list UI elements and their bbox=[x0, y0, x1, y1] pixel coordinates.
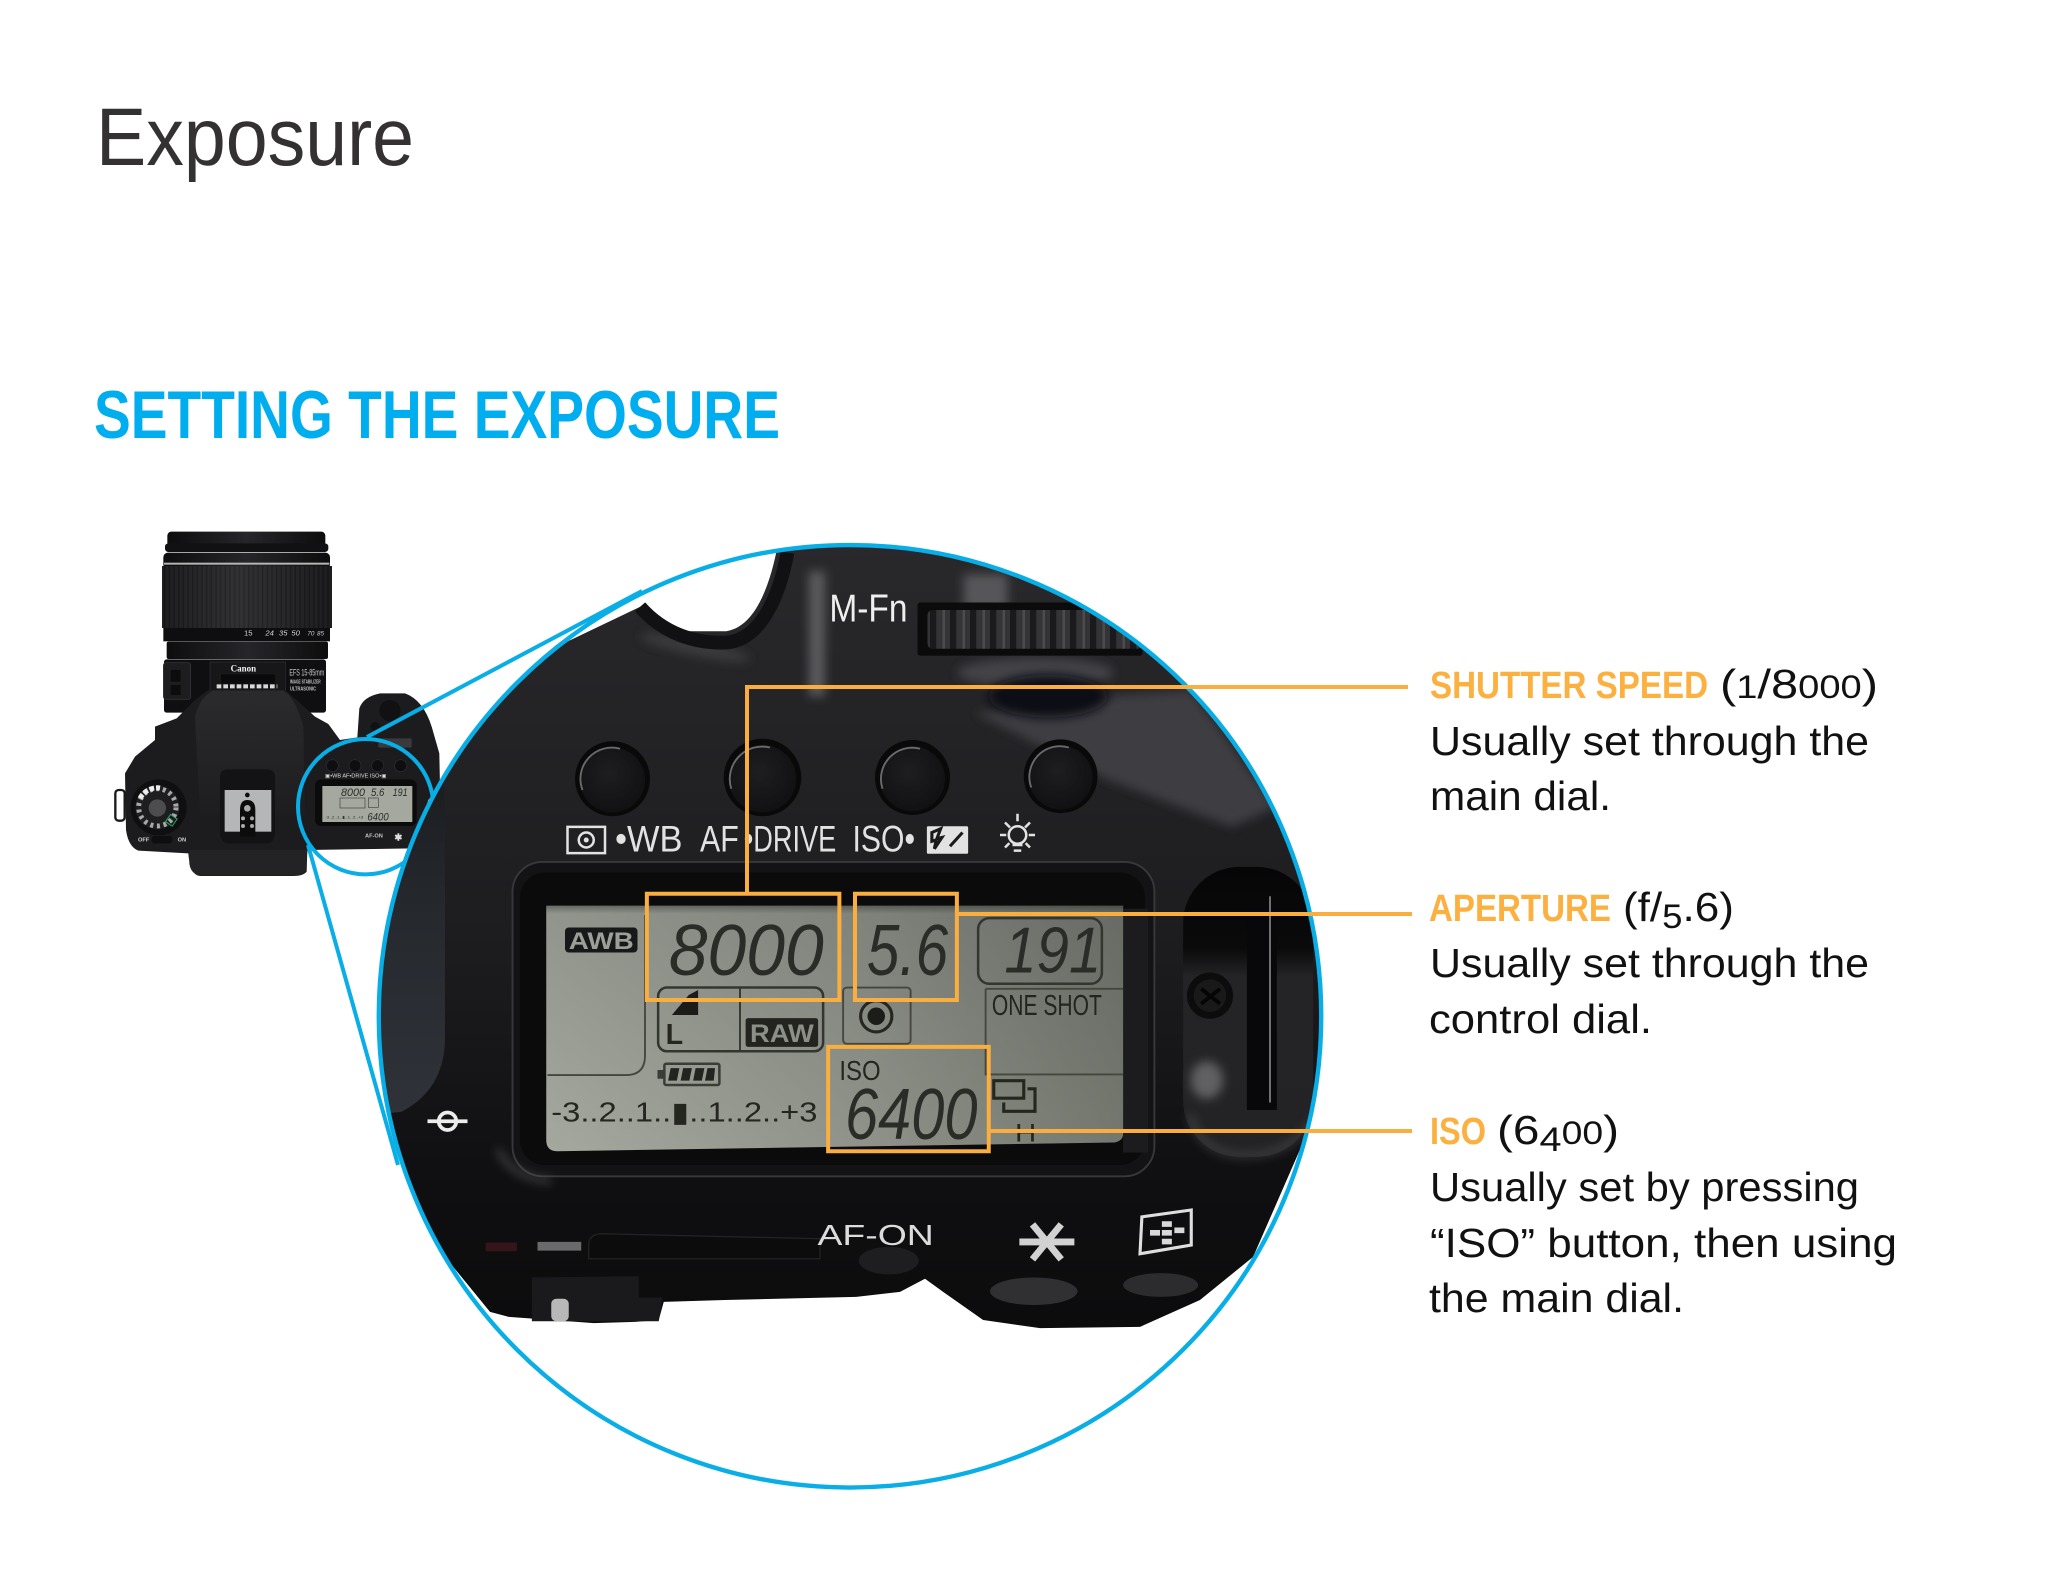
quality box bbox=[658, 988, 823, 1051]
dial recess bbox=[1183, 867, 1314, 1157]
callout: ISO bbox=[1429, 1107, 1897, 1321]
small top LCD panel: ✱ bbox=[394, 833, 402, 843]
LCD screen: L bbox=[666, 1019, 683, 1051]
LCD bezel bbox=[498, 862, 1154, 1181]
callout: ISO: 4 bbox=[1540, 1121, 1562, 1159]
callout: ISO: “ISO” button, then using bbox=[1430, 1220, 1897, 1266]
ISO readout: ISO bbox=[839, 1055, 881, 1086]
big magnifier circle bbox=[379, 545, 1321, 1488]
lens: 50 bbox=[291, 628, 301, 637]
ISO box bbox=[828, 1047, 989, 1151]
hot shoe bbox=[220, 769, 275, 843]
shutter speed box bbox=[647, 894, 839, 1000]
LCD screen bbox=[520, 872, 1148, 1165]
callout: aperture: control dial. bbox=[1429, 996, 1652, 1042]
mode dial: OFF bbox=[138, 837, 150, 843]
callout: aperture: 5 bbox=[1662, 898, 1683, 936]
button labels: AF bbox=[700, 817, 739, 859]
lens bbox=[162, 532, 332, 713]
small top LCD panel: -3..2..1..▮..1..2..+3 bbox=[325, 814, 364, 819]
camera body bbox=[125, 690, 440, 876]
callout: ISO: (6 bbox=[1497, 1107, 1533, 1153]
lower controls bbox=[486, 1210, 1198, 1321]
LCD screen: H bbox=[1015, 1119, 1036, 1147]
callout: ISO: 00 bbox=[1562, 1115, 1603, 1151]
exposure scale: -3..2..1..▮..1..2..+3 bbox=[551, 1096, 818, 1127]
lens: 85 bbox=[317, 630, 325, 637]
callout: ISO: Usually set by pressing bbox=[1430, 1164, 1859, 1210]
small top LCD panel: 8000 bbox=[341, 787, 366, 799]
callout: shutter speed: (1/8000) bbox=[1720, 661, 1878, 707]
LCD screen: AWB bbox=[569, 928, 634, 955]
small top LCD panel bbox=[315, 760, 417, 843]
frame counter bbox=[978, 918, 1102, 984]
lens: 70 bbox=[307, 630, 315, 637]
lens: Canon bbox=[231, 663, 256, 673]
heading: SETTING THE EXPOSURE bbox=[94, 377, 780, 453]
button labels: ISO• bbox=[852, 817, 915, 859]
lens: 15 bbox=[244, 628, 253, 637]
body highlights bbox=[638, 552, 1277, 827]
dial bbox=[918, 602, 1142, 656]
callout: ISO: ) bbox=[1603, 1107, 1617, 1153]
LCD screen: 6400 bbox=[845, 1074, 978, 1155]
AF point icon bbox=[428, 1112, 468, 1130]
battery bbox=[664, 1064, 719, 1085]
button labels: •WB bbox=[615, 817, 682, 859]
strap lug bbox=[115, 790, 125, 821]
top buttons bbox=[575, 739, 1098, 816]
leader lines bbox=[747, 687, 1412, 1131]
shutter readout: 8000 bbox=[669, 910, 824, 991]
orange highlight boxes bbox=[647, 894, 989, 1151]
LCD screen: RAW bbox=[750, 1020, 814, 1048]
small top LCD panel: 191 bbox=[393, 787, 408, 799]
lens: IMAGE STABILIZER bbox=[290, 680, 321, 686]
callout: aperture: APERTURE bbox=[1429, 888, 1611, 930]
small magnifier circle bbox=[298, 739, 433, 874]
button labels bbox=[568, 814, 1035, 859]
pentaprism bbox=[195, 691, 305, 817]
mode dial: ON bbox=[178, 837, 186, 843]
callout: shutter speed: SHUTTER SPEED bbox=[1430, 665, 1708, 707]
magnified camera detail bbox=[370, 540, 1350, 1488]
lens: 24 bbox=[264, 628, 274, 637]
metering box bbox=[843, 988, 911, 1044]
AF point selector icon bbox=[1140, 1210, 1191, 1254]
infographic canvas bbox=[96, 108, 1894, 1490]
asterisk icon bbox=[1019, 1224, 1074, 1259]
eyepiece bbox=[189, 850, 307, 875]
lens: ULTRASONIC bbox=[290, 686, 316, 692]
ONE SHOT label: ONE SHOT bbox=[992, 990, 1102, 1022]
small top LCD panel: ▣•WB AF•DRIVE ISO•▣ bbox=[325, 773, 387, 779]
AWB badge bbox=[565, 928, 638, 952]
lower controls: AF-ON bbox=[818, 1220, 934, 1252]
callout: aperture: (f/ bbox=[1623, 884, 1659, 930]
drive icon bbox=[994, 1081, 1035, 1111]
small top LCD panel: 6400 bbox=[367, 812, 389, 824]
camera top view bbox=[115, 532, 440, 876]
M-Fn label: M-Fn bbox=[829, 587, 908, 630]
eyepiece side panel bbox=[381, 873, 445, 1113]
lens: EFS 15-85mm bbox=[289, 667, 324, 677]
callout: shutter speed: main dial. bbox=[1430, 773, 1611, 819]
callout: aperture: .6) bbox=[1683, 884, 1734, 930]
title: Exposure bbox=[96, 92, 414, 183]
aperture readout: 5.6 bbox=[867, 910, 949, 991]
lens: 35 bbox=[279, 628, 288, 637]
button labels: •DRIVE bbox=[744, 817, 836, 859]
LCD dividers bbox=[548, 915, 1123, 1075]
callout: shutter speed bbox=[1430, 661, 1878, 819]
zoom lines bbox=[308, 591, 642, 1165]
callout: aperture bbox=[1429, 884, 1869, 1042]
small top LCD panel: AF-ON bbox=[365, 833, 383, 839]
callout: shutter speed: Usually set through the bbox=[1430, 718, 1869, 764]
grip buttons bbox=[370, 700, 412, 748]
callout: ISO: ISO bbox=[1430, 1111, 1486, 1153]
callout: aperture: Usually set through the bbox=[1430, 940, 1869, 986]
camera body close-up bbox=[370, 540, 1350, 1328]
mode dial bbox=[131, 779, 187, 843]
small top LCD panel: 5.6 bbox=[371, 787, 385, 799]
LCD screen: 191 bbox=[1004, 914, 1101, 987]
callout: ISO: the main dial. bbox=[1429, 1275, 1684, 1321]
aperture box bbox=[855, 894, 957, 1000]
